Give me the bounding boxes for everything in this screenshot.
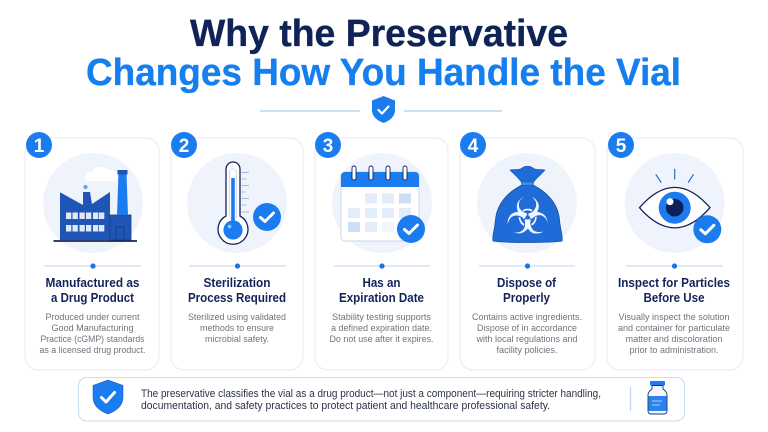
callout text — [141, 388, 601, 412]
heading: Manufactured as — [46, 276, 140, 290]
description: Good Manufacturing — [52, 323, 134, 334]
heading: Before Use — [644, 291, 705, 305]
callout text: The preservative classifies the vial as a drug product—not just a component—requiring stricter handling, — [141, 388, 601, 400]
icon: vial — [648, 381, 667, 414]
number badge 1 — [26, 132, 52, 158]
description: Contains active ingredients. — [472, 312, 582, 323]
description — [472, 312, 582, 356]
title divider with shield icon — [260, 96, 502, 123]
number badge 3 — [315, 132, 341, 158]
heading: a Drug Product — [51, 291, 135, 305]
description: Stability testing supports — [332, 312, 431, 323]
heading: Sterilization — [204, 276, 270, 290]
heading — [188, 276, 286, 305]
description: Produced under current — [46, 312, 140, 323]
callout — [78, 378, 684, 421]
heading: Properly — [503, 291, 550, 305]
description: with local regulations and — [476, 334, 578, 345]
icon: calendar — [332, 153, 432, 253]
description: facility policies. — [496, 345, 558, 356]
icon: factory — [43, 153, 143, 253]
panel: has an expiration date — [315, 132, 448, 370]
description: matter and discoloration — [626, 334, 722, 345]
panel: manufactured as a drug product — [25, 132, 159, 370]
icon: biohazard bag — [477, 153, 577, 253]
icon: shield check — [93, 380, 123, 414]
panel: inspect for particles before use — [607, 132, 743, 370]
description: Dispose of in accordance — [477, 323, 577, 334]
heading — [339, 276, 424, 305]
description: prior to administration. — [630, 345, 718, 356]
heading: Expiration Date — [339, 291, 424, 305]
callout text: documentation, and safety practices to protect patient and healthcare professional safety. — [141, 400, 550, 412]
title — [86, 13, 681, 94]
description: Do not use after it expires. — [330, 334, 434, 345]
number badge 4 — [460, 132, 486, 158]
heading — [46, 276, 140, 305]
description: Visually inspect the solution — [618, 312, 730, 323]
description — [618, 312, 730, 356]
description: as a licensed drug product. — [40, 345, 146, 356]
number badge 1: 1 — [34, 136, 45, 157]
heading — [618, 276, 730, 305]
icon: eye — [624, 153, 724, 253]
description: and container for particulate — [618, 323, 730, 334]
description — [188, 312, 286, 345]
title: Why the Preservative — [190, 13, 568, 55]
number badge 2 — [171, 132, 197, 158]
panel: sterilization process required — [171, 132, 303, 370]
panel: dispose of properly — [460, 132, 595, 370]
number badge 4: 4 — [468, 136, 479, 157]
number badge 2: 2 — [179, 136, 189, 157]
description: methods to ensure — [200, 323, 274, 334]
heading: Dispose of — [497, 276, 557, 290]
heading: Has an — [362, 276, 400, 290]
description: microbial safety. — [205, 334, 269, 345]
description: a defined expiration date. — [331, 323, 432, 334]
heading — [497, 276, 557, 305]
heading: Inspect for Particles — [618, 276, 730, 290]
description: Sterilized using validated — [188, 312, 286, 323]
number badge 5: 5 — [616, 136, 627, 157]
description — [330, 312, 434, 345]
icon: biohazard bag: ☣ — [505, 188, 550, 246]
number badge 5 — [608, 132, 634, 158]
number badge 3: 3 — [323, 136, 333, 157]
heading: Process Required — [188, 291, 286, 305]
title: Changes How You Handle the Vial — [86, 52, 681, 94]
description: Practice (cGMP) standards — [40, 334, 145, 345]
description — [40, 312, 146, 356]
icon: thermometer — [187, 153, 287, 253]
